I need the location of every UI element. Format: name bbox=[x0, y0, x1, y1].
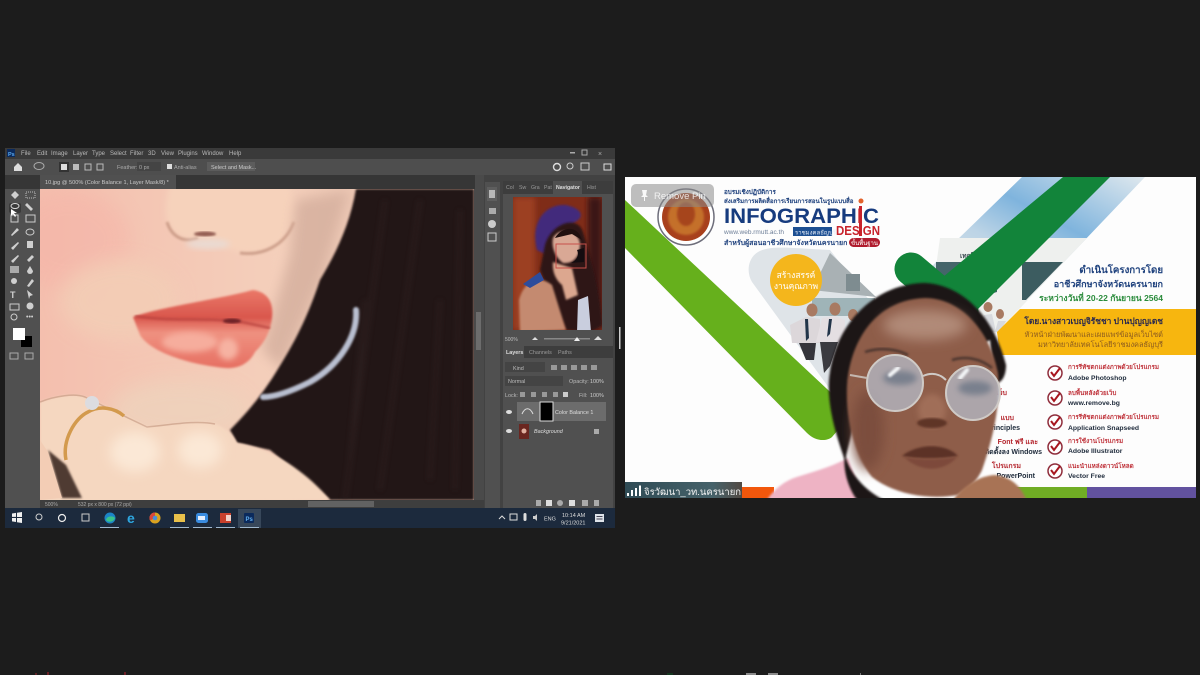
hair bbox=[829, 283, 1006, 460]
layer: Background bbox=[506, 424, 599, 439]
yellow badge: สร้างสรรค์งานคุณภาพ: สร้างสรรค์ bbox=[777, 270, 815, 280]
cropped marks at bottom edge bbox=[35, 672, 861, 675]
taskbar bbox=[5, 508, 615, 528]
icon: chrome bbox=[150, 512, 160, 524]
icon: internet explorer: e bbox=[127, 510, 135, 526]
organiser heading: ระหว่างวันที่ 20-22 กันยายน 2564 bbox=[1039, 291, 1163, 303]
remove pin button: Remove Pin bbox=[654, 191, 706, 202]
topic: remove.bg: ลบพื้นหลังด้วยเว็บ bbox=[1068, 387, 1116, 397]
topic: Snapseed: การรีทัชตกแต่งภาพด้วยโปรแกรม bbox=[1068, 412, 1159, 421]
document tab bbox=[5, 175, 475, 189]
poster title block: www.web.rmutt.ac.th bbox=[723, 229, 784, 236]
panel: layers: Fill: bbox=[579, 393, 587, 399]
navigator view box bbox=[556, 244, 586, 268]
organiser heading: ดำเนินโครงการโดย bbox=[1079, 264, 1163, 276]
splitter handle bbox=[619, 327, 620, 349]
menu bar: Filter bbox=[130, 151, 143, 157]
panel: Photoshop window bbox=[5, 148, 615, 528]
topics list, left column: Font ฟรี และ bbox=[998, 438, 1038, 446]
panel: navigator: Navigator bbox=[556, 185, 580, 191]
light green diagonal band bbox=[625, 200, 845, 440]
navigator photo preview bbox=[513, 197, 602, 332]
menu bar: Select bbox=[110, 151, 127, 157]
glasses bbox=[850, 355, 1000, 420]
topics list, left column bbox=[984, 388, 1042, 480]
icon: file explorer bbox=[174, 514, 185, 522]
photo canvas: retouched face close-up bbox=[10, 183, 474, 505]
poster title block: อบรมเชิงปฏิบัติการ bbox=[724, 188, 776, 196]
yellow speaker band bbox=[997, 309, 1196, 355]
icon: photoshop bbox=[238, 509, 261, 528]
topic: Vector Free: Vector Free bbox=[1068, 473, 1105, 480]
toolbar: ••• bbox=[26, 314, 34, 321]
yellow badge: สร้างสรรค์งานคุณภาพ bbox=[770, 254, 822, 306]
menu bar: Type bbox=[92, 151, 106, 157]
topics list, left column: Principles bbox=[987, 425, 1020, 432]
menu bar bbox=[5, 148, 615, 159]
layer: Background: Background bbox=[534, 429, 564, 435]
system tray: 9/21/2021 bbox=[561, 520, 585, 526]
colour strip at slide bottom bbox=[742, 487, 1196, 498]
topics list, left column: ติดตั้งลง Windows bbox=[984, 445, 1042, 456]
topic: Snapseed: Application Snapseed bbox=[1068, 425, 1139, 432]
system tray: ENG bbox=[544, 516, 556, 522]
topic: Adobe Photoshop: การรีทัชตกแต่งภาพด้วยโปรแกรม bbox=[1068, 362, 1159, 371]
presenter bbox=[764, 283, 1028, 505]
right photo diagonal: sky and building: เทคโนโลยี bbox=[960, 251, 990, 260]
slide: Infographic Design training poster bbox=[625, 177, 1196, 505]
icon: college crest bbox=[658, 189, 714, 245]
hand and ring bbox=[40, 395, 330, 505]
menu bar: × bbox=[598, 151, 602, 158]
yellow badge: สร้างสรรค์งานคุณภาพ: งานคุณภาพ bbox=[774, 281, 818, 292]
topic: remove.bg bbox=[1048, 387, 1120, 407]
menu bar: File bbox=[21, 151, 31, 157]
topic: remove.bg: www.remove.bg bbox=[1067, 400, 1120, 407]
taskbar: Ps bbox=[246, 517, 254, 523]
toolbar: T bbox=[10, 290, 16, 300]
canvas scrollbars and status: 500% bbox=[45, 502, 58, 508]
poster title block: ราชมงคลธัญบุรี bbox=[795, 228, 837, 236]
panel: navigator: Sw bbox=[519, 185, 526, 191]
system tray bbox=[499, 513, 604, 526]
panel: navigator: Gra bbox=[531, 185, 540, 191]
hair bbox=[230, 189, 474, 500]
panel: layers bbox=[503, 346, 613, 508]
dock icons bbox=[484, 175, 615, 508]
topic: Adobe Photoshop bbox=[1048, 362, 1159, 382]
document tab: 10.jpg @ 500% (Color Balance 1, Layer Mask/8) * bbox=[45, 180, 170, 186]
system tray: 10:14 AM bbox=[562, 513, 586, 519]
topics list, left column: โปรแกรม bbox=[991, 461, 1021, 470]
menu bar: Layer bbox=[73, 151, 88, 157]
topic: Adobe Illustrator: Adobe Illustrator bbox=[1068, 448, 1123, 455]
menu bar: View bbox=[161, 151, 175, 157]
canvas scrollbars and status bbox=[40, 189, 484, 508]
panel: Zoom video of slide and presenter bbox=[625, 177, 1196, 505]
poster title block: INFOGRAPHIC bbox=[724, 204, 879, 228]
options bar: Select and Mask... bbox=[211, 165, 257, 171]
yellow speaker band: หัวหน้าฝ่ายพัฒนาและเผยแพร่ข้อมูลเว็บไซต์ bbox=[1024, 329, 1163, 339]
topics list, left column: แบบ bbox=[1001, 415, 1015, 422]
yellow speaker band: โดย.นางสาวเบญจิรัชชา ปานปุญญเดช bbox=[1023, 316, 1163, 327]
icon: nose bbox=[166, 183, 295, 254]
panel: layers: Lock: bbox=[505, 393, 518, 399]
topics list, right column bbox=[1048, 362, 1159, 480]
icon: edge bbox=[104, 512, 116, 524]
menu bar: Window bbox=[202, 151, 224, 157]
poster title block: สำหรับผู้สอนอาชีวศึกษาจังหวัดนครนายก bbox=[724, 238, 847, 248]
poster title block: ขั้นพื้นฐาน bbox=[851, 237, 878, 247]
face bbox=[847, 298, 998, 497]
layer: Color Balance 1: Color Balance 1 bbox=[555, 410, 593, 416]
icon: zoom bbox=[196, 513, 208, 523]
organiser heading: อาชีวศึกษาจังหวัดนครนายก bbox=[1054, 279, 1163, 289]
cheek blush bbox=[72, 210, 118, 260]
hand under chin bbox=[952, 474, 1026, 498]
canvas scrollbars and status: 532 px x 800 px (72 ppi) bbox=[78, 502, 132, 508]
poster title block: ส่งเสริมการผลิตสื่อการเรียนการสอนในรูปแบบสื่อ bbox=[724, 196, 854, 206]
panel: layers: Layers bbox=[506, 350, 523, 356]
panel: layers: Opacity: bbox=[569, 379, 589, 385]
topics list, left column: PowerPoint bbox=[996, 473, 1036, 480]
topic: Vector Free: แนะนำแหล่งดาวน์โหลด bbox=[1068, 462, 1134, 470]
topic: Snapseed bbox=[1048, 412, 1159, 432]
options bar: 0 px bbox=[139, 165, 150, 171]
topic: Adobe Illustrator bbox=[1048, 436, 1123, 455]
panel: layers: Kind bbox=[513, 366, 524, 372]
foreground and background colour bbox=[13, 328, 32, 347]
topics list, left column: เว็บ bbox=[996, 388, 1008, 397]
remove pin button bbox=[631, 184, 714, 207]
topic: Adobe Photoshop: Adobe Photoshop bbox=[1068, 375, 1127, 382]
layer: Color Balance 1 bbox=[506, 402, 606, 421]
dark green check mark bbox=[911, 177, 1110, 315]
icon: windows bbox=[12, 512, 22, 523]
name tag bbox=[625, 482, 742, 498]
topic: Adobe Illustrator: การใช้งานโปรแกรม bbox=[1068, 436, 1123, 445]
menu bar: Help bbox=[229, 151, 242, 157]
staff group bbox=[790, 302, 858, 373]
menu bar: Edit bbox=[37, 151, 48, 157]
panel: navigator bbox=[503, 181, 613, 346]
options bar: Anti-alias bbox=[174, 165, 197, 171]
icon: powerpoint bbox=[220, 513, 231, 523]
nose and mouth bbox=[917, 418, 947, 428]
shirt bbox=[766, 458, 857, 498]
right photo diagonal: sky and building bbox=[932, 177, 1145, 334]
left photo diamond with staff bbox=[749, 248, 885, 392]
yellow speaker band: มหาวิทยาลัยเทคโนโลยีราชมงคลธัญบุรี bbox=[1038, 340, 1163, 349]
small staff figures at right bbox=[981, 302, 1006, 332]
panel: layers: Paths bbox=[558, 350, 572, 356]
panel: layers: 100% bbox=[590, 379, 604, 385]
menu bar: 3D bbox=[148, 151, 156, 157]
panel: layers: Normal bbox=[508, 379, 525, 385]
organiser heading bbox=[1039, 264, 1163, 303]
menu bar: Ps bbox=[8, 152, 15, 158]
name tag: จิรวัฒนา_วท.นครนายก bbox=[644, 487, 741, 498]
poster title block bbox=[723, 188, 880, 248]
panel: navigator: Col bbox=[506, 185, 514, 191]
options bar bbox=[5, 159, 615, 175]
menu bar: Image bbox=[51, 151, 68, 157]
toolbar bbox=[5, 189, 40, 508]
options bar: Feather: bbox=[117, 165, 138, 171]
panel: layers: Channels bbox=[529, 350, 552, 356]
shadow beside nose bbox=[262, 190, 350, 370]
topic: Vector Free bbox=[1048, 462, 1134, 480]
panel: navigator: Hist bbox=[587, 185, 596, 191]
panel: navigator: 500% bbox=[505, 337, 518, 343]
menu bar: Plugins bbox=[178, 151, 198, 157]
lips bbox=[133, 290, 272, 368]
panel: navigator: Pat bbox=[544, 185, 552, 191]
poster title block: DES GN bbox=[836, 224, 880, 238]
panel: layers: 100% bbox=[590, 393, 604, 399]
